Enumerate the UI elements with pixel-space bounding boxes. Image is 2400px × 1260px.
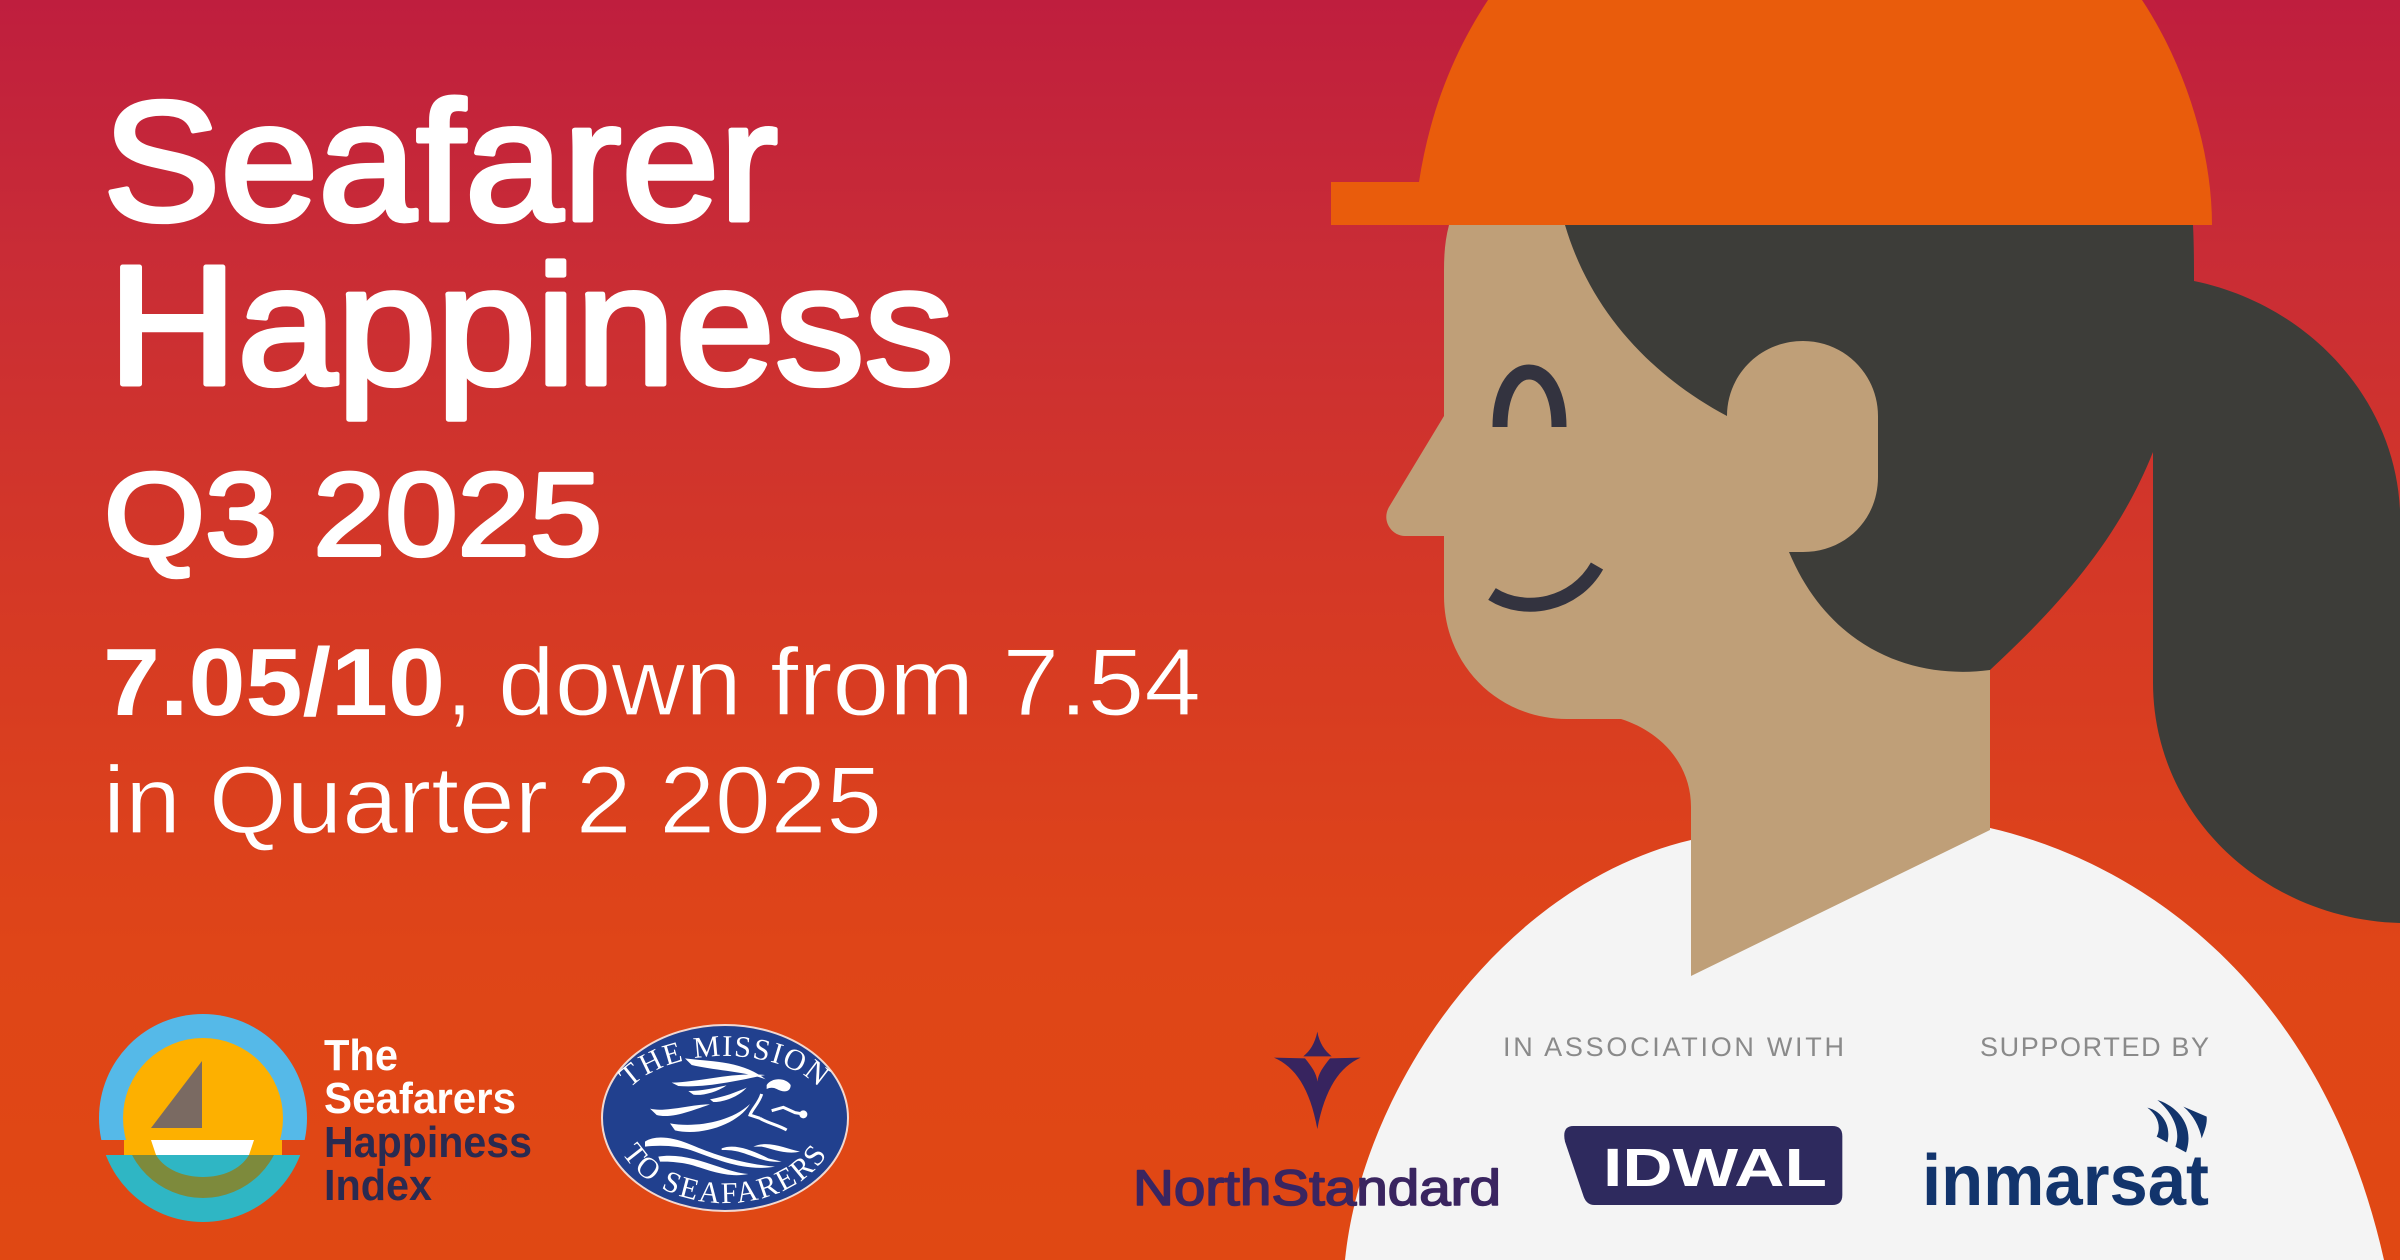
seal lettering	[618, 1036, 831, 1204]
headline score: in Quarter 2 2025	[103, 747, 882, 854]
headline score	[103, 629, 1201, 854]
seal lettering: TO SEAFARERS	[624, 1142, 824, 1204]
flying angel	[650, 1058, 807, 1132]
logo: NorthStandard	[1133, 1032, 1501, 1216]
hard hat	[1331, 0, 2212, 225]
signal arcs	[2147, 1100, 2207, 1152]
logo: The Mission to Seafarers	[601, 1024, 849, 1212]
NorthStandard star	[1274, 1032, 1361, 1129]
headline score: ,	[446, 629, 473, 736]
ear	[1700, 341, 1878, 552]
hair and ponytail	[1565, 225, 2400, 923]
logo: Inmarsat	[1922, 1100, 2209, 1221]
logo wordmark: Happiness	[324, 1118, 532, 1167]
title: Seafarer	[103, 67, 778, 257]
title: Happiness	[108, 231, 954, 421]
logo wordmark: Seafarers	[324, 1074, 516, 1123]
logo wordmark: The	[324, 1031, 398, 1080]
logo roundel	[99, 1014, 307, 1222]
seal lettering: THE MISSION	[618, 1036, 831, 1086]
headline score: down from 7.54	[498, 629, 1201, 736]
logo: The Seafarers Happiness Index	[99, 1014, 532, 1222]
logo: Idwal	[1564, 1126, 1842, 1205]
logo wordmark: Index	[324, 1161, 432, 1210]
eye	[1500, 372, 1559, 427]
NorthStandard wordmark: NorthStandard	[1133, 1160, 1501, 1216]
subtitle: quarter: Q3 2025	[104, 449, 602, 581]
smile	[1492, 566, 1597, 605]
Inmarsat wordmark: inmarsat	[1922, 1141, 2209, 1221]
illustration: seafarer in hard hat	[1331, 0, 2400, 1260]
face and neck	[1386, 225, 1990, 976]
logo: Idwal: IDWAL	[1603, 1138, 1827, 1198]
label: in association with: IN ASSOCIATION WITH	[1503, 1032, 1844, 1062]
headline score: 7.05/10	[103, 629, 445, 736]
title	[103, 67, 954, 421]
shirt	[1345, 828, 2384, 1260]
logo wordmark	[324, 1031, 532, 1210]
label: supported by: SUPPORTED BY	[1980, 1032, 2209, 1062]
waves	[645, 1138, 800, 1175]
